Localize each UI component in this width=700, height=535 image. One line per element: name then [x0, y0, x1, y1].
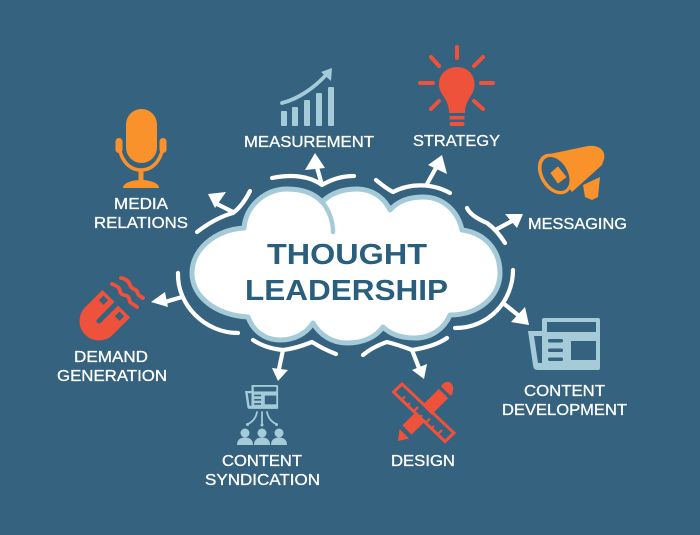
label: media relations: MEDIA	[114, 196, 169, 213]
label: media relations	[94, 196, 188, 232]
icon: pencil and ruler	[394, 382, 454, 442]
label: demand generation	[57, 349, 167, 385]
label: media relations: RELATIONS	[94, 215, 188, 232]
label: content syndication	[205, 453, 320, 489]
label: demand generation: DEMAND	[74, 349, 148, 366]
icon: content syndication	[237, 385, 287, 445]
cloud title: THOUGHT	[267, 239, 427, 271]
cloud title: LEADERSHIP	[245, 275, 448, 307]
label: content development: DEVELOPMENT	[502, 402, 628, 419]
label: content syndication: SYNDICATION	[205, 472, 320, 489]
icon: bar chart with arrow	[281, 68, 334, 126]
small newspaper	[245, 385, 278, 409]
label: design: DESIGN	[391, 453, 455, 470]
icon: newspaper	[528, 318, 600, 370]
arrow: design	[363, 338, 447, 379]
label: strategy: STRATEGY	[413, 133, 500, 150]
arrow: content development	[455, 270, 529, 328]
label: measurement: MEASUREMENT	[244, 134, 375, 151]
arrow: demand generation	[151, 273, 238, 333]
label: content development	[502, 383, 628, 419]
icon: magnet	[88, 278, 143, 332]
label: demand generation: GENERATION	[57, 368, 167, 385]
icon: microphone	[116, 109, 166, 188]
label: content syndication: CONTENT	[222, 453, 303, 470]
label: content development: CONTENT	[524, 383, 606, 400]
arrow: media relations	[197, 191, 250, 232]
arrow: strategy	[376, 155, 450, 193]
label: messaging: MESSAGING	[528, 216, 627, 233]
arrow: measurement	[272, 153, 354, 185]
cloud title	[245, 239, 448, 307]
icon: megaphone	[531, 146, 604, 201]
central cloud	[192, 189, 500, 343]
icon: light bulb	[420, 47, 493, 126]
arrow: content syndication	[253, 340, 336, 381]
arrow: messaging	[467, 208, 523, 243]
